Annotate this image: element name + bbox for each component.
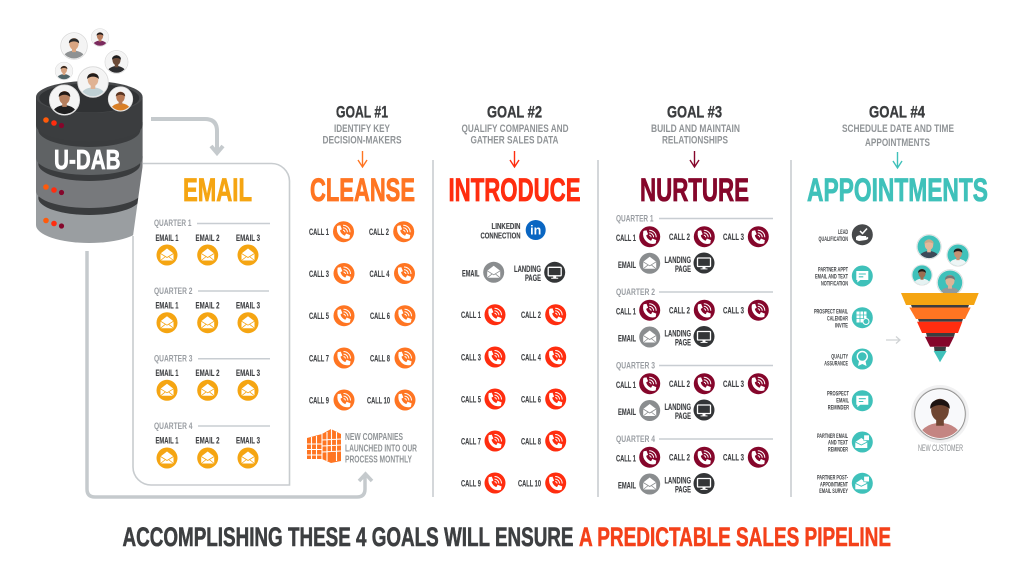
- quarter 3 touches: PAGE: [675, 411, 691, 422]
- calls 1 to 10: CALL 4: [521, 352, 541, 364]
- calls 1 to 10: CALL 2: [521, 310, 541, 321]
- step: partner email and text reminder: PARTNER EMAIL: [817, 433, 848, 440]
- quarter 3 emails: EMAIL 3: [236, 368, 260, 379]
- quarter 1 touches: QUARTER 1: [616, 214, 654, 224]
- goal 3 header: BUILD AND MAINTAIN: [651, 123, 740, 135]
- calls 1 to 10: CALL 2: [369, 227, 389, 238]
- goal 2 header: [462, 104, 569, 146]
- step: lead qualification: QUALIFICATION: [818, 236, 848, 243]
- goal 1 header: DECISION-MAKERS: [322, 134, 402, 146]
- linkedin connection: LINKEDIN: [492, 222, 521, 231]
- quarter 4 emails: EMAIL 1: [156, 436, 179, 446]
- note: new companies: PROCESS MONTHLY: [345, 454, 412, 466]
- step: prospect calendar invite: [814, 307, 873, 330]
- database with people: [36, 29, 143, 243]
- quarter 4 touches: EMAIL: [618, 480, 636, 492]
- quarter 1 touches: [616, 214, 773, 275]
- quarter 2 touches: CALL 2: [669, 306, 690, 316]
- quarter 2 touches: CALL 1: [616, 306, 636, 318]
- calls 1 to 10: CALL 8: [521, 436, 541, 448]
- arrow: database to email: [151, 119, 223, 153]
- step: partner appointment notification: NOTIFICATION: [821, 280, 848, 288]
- label: new customer: NEW CUSTOMER: [918, 443, 963, 454]
- quarter 3 touches: [616, 360, 773, 422]
- quarter 2 touches: QUARTER 2: [616, 287, 655, 298]
- quarter 1 emails: EMAIL 1: [156, 233, 179, 244]
- heading: nurture: NURTURE: [640, 172, 749, 208]
- quarter 2 emails: QUARTER 2: [154, 286, 192, 297]
- calls 1 to 10: CALL 1: [461, 310, 481, 321]
- calls 1 to 10: CALL 1: [309, 227, 329, 238]
- calls 1 to 10: CALL 3: [461, 352, 481, 364]
- quarter 1 touches: CALL 3: [723, 232, 744, 243]
- note: new companies: LAUNCHED INTO OUR: [345, 444, 418, 454]
- calls 1 to 10: CALL 9: [461, 478, 481, 490]
- quarter 3 touches: LANDING: [664, 402, 691, 413]
- quarter 3 emails: [154, 354, 270, 401]
- quarter 3 emails: EMAIL 1: [156, 368, 179, 379]
- quarter 1 emails: EMAIL 2: [196, 233, 220, 244]
- goal 3 header: RELATIONSHIPS: [662, 134, 728, 146]
- step: prospect email reminder: EMAIL: [836, 398, 849, 404]
- step: prospect email reminder: PROSPECT: [827, 390, 849, 398]
- step: partner email and text reminder: AND TEXT: [828, 440, 848, 446]
- step: lead qualification: LEAD: [838, 229, 848, 236]
- panel: goal 4 appointments: [807, 104, 988, 495]
- quarter 4 touches: CALL 3: [723, 452, 744, 464]
- people portraits: [50, 29, 133, 125]
- status lights: [43, 117, 64, 229]
- step: partner post-appointment email survey: [817, 473, 873, 495]
- step: prospect calendar invite: PROSPECT EMAIL: [814, 308, 848, 316]
- arrow: database to cleanse: [87, 251, 372, 497]
- goal 2 header: GATHER SALES DATA: [470, 134, 559, 146]
- quarter 2 touches: EMAIL: [618, 334, 636, 344]
- quarter 4 touches: CALL 2: [669, 452, 690, 464]
- panel: goal 1 cleanse: [307, 104, 418, 466]
- footer statement: A PREDICTABLE SALES PIPELINE: [579, 522, 891, 552]
- footer statement: ACCOMPLISHING THESE 4 GOALS WILL ENSURE: [122, 522, 574, 552]
- email and landing page: EMAIL: [462, 268, 480, 280]
- calls 1 to 10: CALL 5: [461, 394, 481, 406]
- arrow: goal 3: [690, 151, 699, 167]
- calls 1 to 10: [309, 221, 416, 410]
- quarter 2 touches: PAGE: [675, 338, 691, 348]
- step: quality assurance: [824, 348, 873, 370]
- quarter 4 emails: EMAIL 3: [236, 436, 260, 446]
- calls 1 to 10: CALL 10: [367, 396, 390, 406]
- quarter 3 emails: EMAIL 2: [196, 368, 220, 379]
- icon: buildings: [307, 429, 341, 463]
- goal 3 header: [651, 104, 740, 146]
- step: prospect email reminder: REMINDER: [828, 404, 849, 412]
- quarter 1 emails: QUARTER 1: [154, 218, 192, 229]
- arrow: goal 2: [510, 151, 519, 167]
- quarter 2 touches: LANDING: [664, 328, 691, 340]
- arrow: goal 1: [358, 151, 367, 167]
- step: partner post-appointment email survey: EMAIL SURVEY: [819, 488, 848, 495]
- step: partner appointment notification: PARTNER APPT: [818, 266, 848, 274]
- goal 4 header: APPOINTMENTS: [865, 137, 930, 149]
- step: partner email and text reminder: [817, 432, 873, 454]
- goal 2 header: QUALIFY COMPANIES AND: [462, 123, 569, 135]
- calls 1 to 10: CALL 6: [370, 311, 390, 322]
- goal 3 header: GOAL #3: [667, 104, 722, 122]
- quarter 4 touches: LANDING: [664, 476, 691, 486]
- quarter 3 touches: QUARTER 3: [616, 360, 655, 372]
- goal 4 header: SCHEDULE DATE AND TIME: [842, 123, 954, 135]
- quarter 1 touches: CALL 1: [616, 233, 636, 244]
- email and landing page: [462, 262, 565, 284]
- new customer portrait: [911, 385, 969, 456]
- quarter 4 emails: EMAIL 2: [196, 436, 220, 446]
- step: quality assurance: ASSURANCE: [824, 360, 848, 368]
- step: lead qualification: [818, 224, 873, 245]
- step: prospect calendar invite: INVITE: [835, 322, 848, 330]
- funnel people: [912, 234, 969, 304]
- quarter 4 touches: QUARTER 4: [616, 434, 656, 445]
- arrow: goal 4: [893, 152, 902, 168]
- panel: email: [133, 163, 290, 485]
- email and landing page: PAGE: [525, 273, 541, 284]
- calls 1 to 10: CALL 10: [518, 478, 541, 490]
- quarter 3 touches: CALL 2: [669, 379, 690, 390]
- heading: introduce: INTRODUCE: [448, 172, 580, 208]
- quarter 1 emails: [154, 218, 270, 266]
- label: U-DAB: U-DAB: [54, 144, 121, 175]
- quarter 1 emails: EMAIL 3: [236, 233, 260, 244]
- step: partner post-appointment email survey: APPOINTMENT: [820, 482, 848, 488]
- panel: goal 2 introduce: [448, 104, 580, 493]
- linkedin connection: CONNECTION: [480, 232, 521, 240]
- calls 1 to 10: CALL 4: [370, 269, 390, 280]
- calls 1 to 10: CALL 5: [309, 311, 329, 322]
- quarter 4 touches: PAGE: [675, 484, 691, 496]
- step: prospect email reminder: [827, 390, 873, 412]
- calls 1 to 10: CALL 8: [370, 354, 390, 364]
- linkedin connection: in: [530, 224, 541, 238]
- goal 1 header: GOAL #1: [336, 104, 388, 122]
- arrow: into funnel: [886, 336, 900, 344]
- quarter 3 touches: EMAIL: [618, 407, 636, 418]
- step: prospect calendar invite: CALENDAR: [827, 316, 848, 322]
- quarter 4 touches: [616, 434, 773, 496]
- step: partner appointment notification: [815, 266, 873, 288]
- calls 1 to 10: CALL 6: [521, 394, 541, 406]
- step: partner email and text reminder: REMINDER: [828, 446, 848, 454]
- quarter 4 emails: [154, 421, 270, 468]
- goal 4 header: [842, 104, 954, 149]
- calls 1 to 10: CALL 9: [309, 396, 329, 406]
- step: partner appointment notification: EMAIL AND TEXT: [815, 274, 848, 280]
- heading: cleanse: CLEANSE: [310, 172, 415, 208]
- calls 1 to 10: CALL 3: [309, 269, 329, 280]
- funnel: [901, 293, 979, 362]
- quarter 1 touches: EMAIL: [618, 260, 636, 271]
- quarter 2 touches: [616, 287, 773, 348]
- calls 1 to 10: CALL 7: [309, 354, 329, 364]
- quarter 1 touches: LANDING: [664, 255, 691, 266]
- calls 1 to 10: CALL 7: [461, 436, 481, 448]
- note: new companies: NEW COMPANIES: [345, 432, 403, 443]
- linkedin connection: [480, 220, 546, 240]
- panel: goal 3 nurture: [616, 104, 773, 495]
- email and landing page: LANDING: [514, 264, 541, 275]
- goal 1 header: [322, 104, 402, 146]
- quarter 4 touches: CALL 1: [616, 454, 636, 464]
- goal 2 header: GOAL #2: [487, 104, 542, 122]
- quarter 2 emails: EMAIL 1: [156, 300, 179, 312]
- quarter 1 touches: CALL 2: [669, 232, 690, 243]
- quarter 2 touches: CALL 3: [723, 306, 744, 316]
- goal 4 header: GOAL #4: [869, 104, 926, 122]
- step: quality assurance: QUALITY: [831, 354, 848, 360]
- step: partner post-appointment email survey: PARTNER POST-: [817, 474, 848, 482]
- quarter 3 touches: CALL 3: [723, 379, 744, 390]
- quarter 3 touches: CALL 1: [616, 380, 636, 391]
- quarter 2 emails: EMAIL 3: [236, 300, 260, 312]
- quarter 2 emails: EMAIL 2: [196, 300, 220, 312]
- goal 1 header: IDENTIFY KEY: [334, 123, 390, 135]
- quarter 3 emails: QUARTER 3: [154, 354, 192, 364]
- quarter 4 emails: QUARTER 4: [154, 421, 193, 432]
- heading: email: EMAIL: [183, 172, 252, 208]
- note: new companies: [345, 432, 418, 466]
- quarter 1 touches: PAGE: [675, 264, 691, 275]
- quarter 2 emails: [154, 286, 269, 333]
- calls 1 to 10: [461, 304, 566, 494]
